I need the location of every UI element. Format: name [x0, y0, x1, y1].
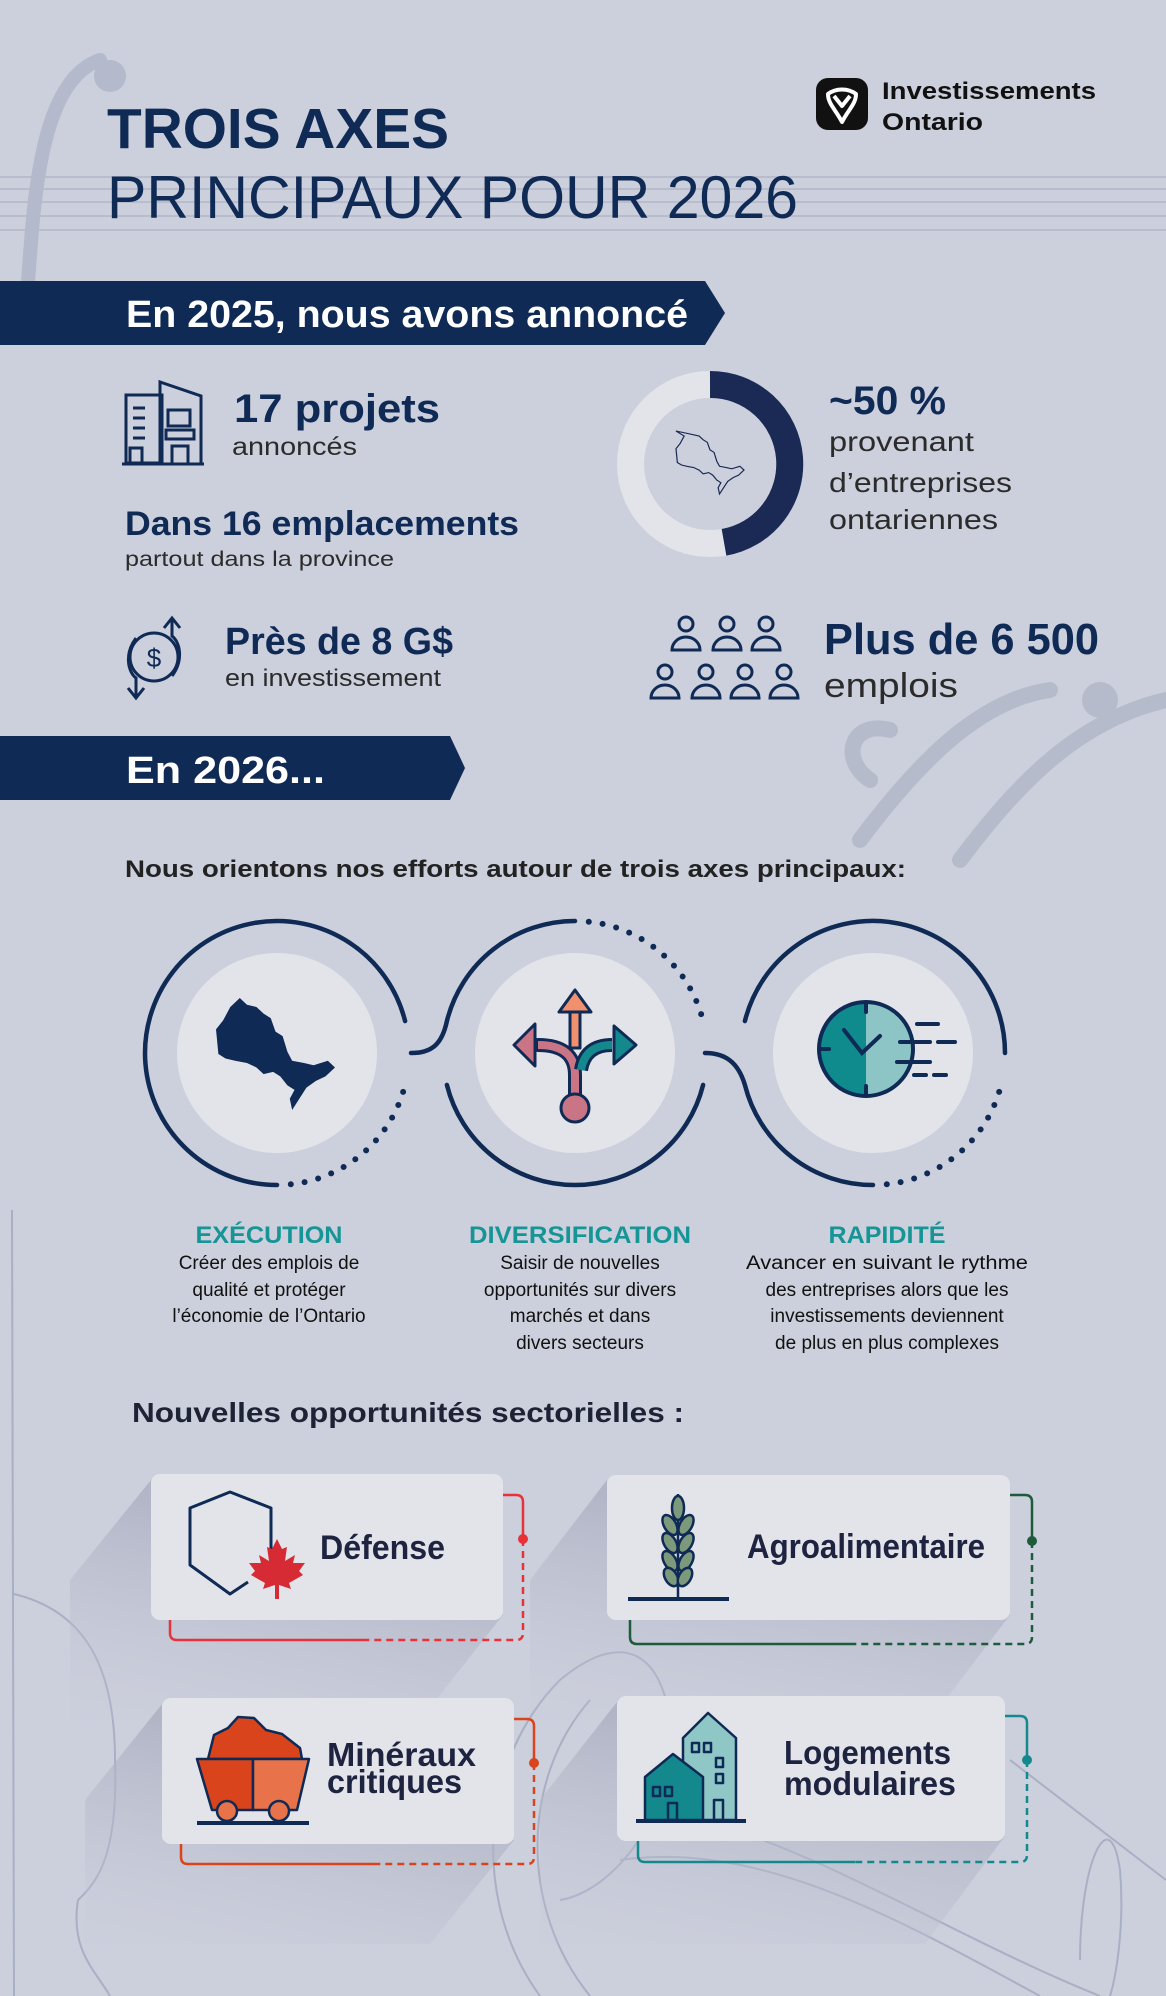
stat: Dans 16 emplacements: partout dans la province: [125, 548, 394, 571]
stat: ~50% provenant: ~50 %: [829, 379, 946, 423]
donut chart: ~50%: [630, 384, 790, 544]
staff lines: [0, 177, 1166, 230]
axis: EXÉCUTION: Créer des emplois de: [179, 1253, 359, 1274]
banner: En 2026: En 2026...: [126, 750, 325, 792]
icon: mining cart: [197, 1717, 309, 1823]
stat: ~50% provenant: provenant: [829, 426, 974, 457]
card: Minéraux critiques: Minéraux: [327, 1736, 477, 1773]
decorative violin and trombone outlines: [12, 1210, 1166, 1996]
icon: clock: [819, 1002, 955, 1096]
stat: 17 projets: 17 projets: [234, 387, 440, 431]
icon: Ontario map: [216, 998, 335, 1110]
icon: diverging arrows: [514, 990, 636, 1122]
logo: Investissements Ontario: Ontario: [882, 109, 983, 136]
stat: Plus de 6 500 emplois: [824, 615, 1099, 705]
stat: Plus de 6 500 emplois: Plus de 6 500: [824, 615, 1099, 664]
axis: EXÉCUTION: qualité et protéger: [192, 1280, 346, 1301]
logo: Investissements Ontario: Investissements: [882, 78, 1096, 105]
stat: Près de 8 G$: Près de 8 G$: [225, 621, 453, 663]
card: Défense: Défense: [320, 1529, 445, 1567]
axis: RAPIDITÉ: [746, 1221, 1028, 1354]
axis: EXÉCUTION: l’économie de l’Ontario: [172, 1306, 366, 1327]
axis: RAPIDITÉ: de plus en plus complexes: [775, 1333, 999, 1354]
card: Logements modulaires: [540, 1696, 1032, 1944]
stat: Près de 8 G$: en investissement: [225, 665, 441, 692]
banner: En 2026: [0, 736, 465, 800]
axis: DIVERSIFICATION: divers secteurs: [516, 1333, 644, 1354]
icon: shield with maple leaf: [190, 1492, 305, 1599]
intro text: Nous orientons nos efforts autour de trois axes principaux:: [125, 856, 906, 883]
stat: ~50% provenant: d’entreprises: [829, 467, 1012, 498]
logo: Investissements Ontario: [816, 78, 1096, 136]
card: Logements modulaires: modulaires: [784, 1765, 956, 1802]
axis: RAPIDITÉ: investissements deviennent: [770, 1306, 1004, 1327]
axis: EXÉCUTION: EXÉCUTION: [196, 1221, 342, 1249]
title: [107, 97, 798, 231]
card: Agroalimentaire: [530, 1475, 1037, 1720]
title: TROIS AXES: [107, 97, 449, 161]
stat: ~50% provenant: [829, 379, 1012, 535]
banner: En 2025: [0, 281, 725, 345]
stat: Dans 16 emplacements: Dans 16 emplacements: [125, 505, 519, 543]
icon: money: [128, 618, 180, 698]
three rings diagram: [145, 921, 1005, 1185]
stat: ~50% provenant: ontariennes: [829, 504, 998, 535]
axis: DIVERSIFICATION: DIVERSIFICATION: [469, 1222, 691, 1249]
axis: EXÉCUTION: [172, 1221, 366, 1327]
decorative f-hole top left: [28, 60, 126, 282]
card: Logements modulaires: Logements: [784, 1734, 951, 1771]
icon: building: [122, 382, 204, 464]
axis: DIVERSIFICATION: opportunités sur divers: [484, 1280, 676, 1301]
axis: DIVERSIFICATION: marchés et dans: [510, 1306, 650, 1327]
stat: Plus de 6 500 emplois: emplois: [824, 667, 958, 705]
axis: DIVERSIFICATION: [469, 1222, 691, 1354]
icon: people: [651, 617, 798, 698]
axis: DIVERSIFICATION: Saisir de nouvelles: [500, 1253, 660, 1274]
stat: Près de 8 G$: [225, 621, 453, 692]
card: Agroalimentaire: Agroalimentaire: [747, 1528, 985, 1566]
card: Minéraux critiques: critiques: [327, 1763, 462, 1800]
stat: Dans 16 emplacements: [125, 505, 519, 571]
title: PRINCIPAUX POUR 2026: [107, 164, 798, 231]
stat: 17 projets: annoncés: [232, 433, 357, 461]
heading: Nouvelles opportunités sectorielles: Nouvelles opportunités sectorielles :: [132, 1397, 684, 1428]
banner: En 2025: En 2025, nous avons annoncé: [126, 294, 688, 336]
icon: money: $: [147, 643, 162, 673]
icon: wheat: [628, 1494, 729, 1599]
axis: RAPIDITÉ: des entreprises alors que les: [766, 1280, 1008, 1301]
card: Minéraux critiques: [85, 1698, 539, 1944]
axis: RAPIDITÉ: Avancer en suivant le rythme: [746, 1253, 1028, 1274]
icon: houses: [636, 1713, 746, 1821]
decorative ff right: [853, 682, 1166, 860]
stat: 17 projets: [232, 387, 440, 461]
axis: RAPIDITÉ: RAPIDITÉ: [828, 1221, 946, 1249]
card: Défense: [70, 1474, 528, 1720]
